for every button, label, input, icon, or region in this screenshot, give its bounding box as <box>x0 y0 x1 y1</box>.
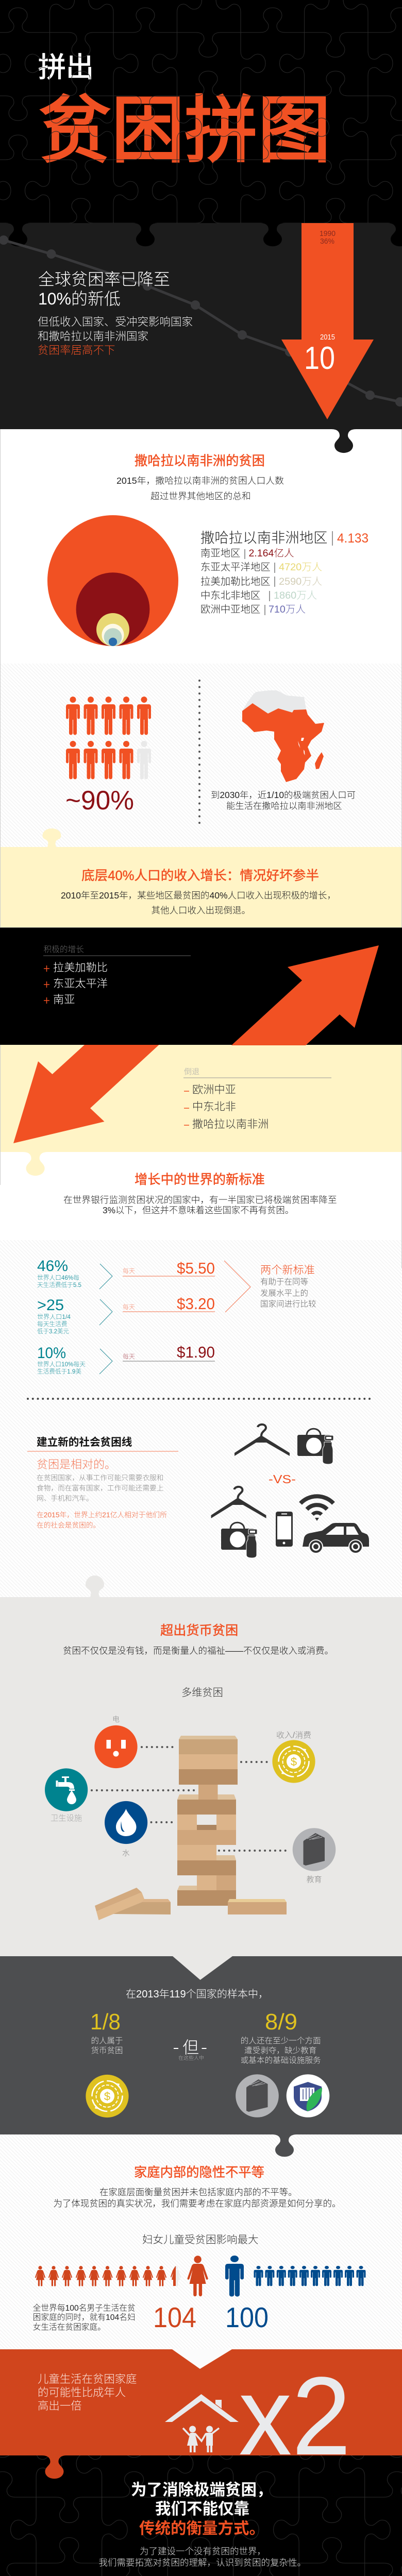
text block: 为了体现贫困的真实状况，我们需要考虑在家庭内部资源是如何分享的。 <box>54 2198 341 2209</box>
text block: 在家庭层面衡量贫困并未包括家庭内部的不平等。 <box>99 2187 297 2197</box>
text block <box>99 2546 306 2576</box>
panel: children <box>0 2349 402 2478</box>
text block: 的可能性比成年人 <box>38 2386 126 2399</box>
panel: new standards <box>0 1152 402 1240</box>
list: positive growth: 东亚太平洋 <box>53 977 108 990</box>
text block: relative poverty: 网、手机和汽车。 <box>37 1495 93 1502</box>
stat: 8/9: 的人还在至少一个方面 <box>241 2036 321 2045</box>
icon: infrastructure shield <box>287 2074 329 2117</box>
text block <box>63 1195 337 1215</box>
text block: low income countries: 和撒哈拉以南非洲国家 <box>38 330 148 343</box>
text block: 104 women: 女生活在贫困家庭。 <box>33 2323 106 2332</box>
puzzle knob <box>42 828 61 847</box>
icons: poor country needs <box>234 1425 333 1464</box>
panel: conclusion <box>0 2455 402 2576</box>
heading: 10%: 全球贫困率已降至 <box>38 270 170 289</box>
puzzle knob <box>23 1152 48 1176</box>
people chart: women <box>35 2256 208 2296</box>
stats: 104 and 100: 100 <box>225 2301 269 2333</box>
map: Africa <box>242 690 324 782</box>
panel: title header <box>0 0 402 224</box>
chevron: large <box>224 1261 250 1312</box>
legend: 1860万人 <box>274 590 317 601</box>
text block: 2015年，撒哈拉以南非洲的贫困人口人数 <box>116 476 284 486</box>
legend: 撒哈拉以南非洲地区 <box>200 530 328 546</box>
poverty line values <box>123 1259 215 1361</box>
stat: ~90%: ~90% <box>65 786 134 816</box>
stats: population share: 世界人口10%每天 <box>37 1361 86 1368</box>
text block <box>38 2373 137 2412</box>
text block: low income countries: 贫困率居高不下 <box>38 344 115 357</box>
stats: population share: 生活费低于1.9美 <box>37 1368 81 1375</box>
list: positive growth: 拉美加勒比 <box>53 961 108 974</box>
icons: rich country needs <box>211 1487 369 1558</box>
stats: population share: >25 <box>37 1297 64 1314</box>
icon: electricity: 电 <box>112 1715 120 1723</box>
arrow: 1990 to 2015: 36% <box>320 237 334 246</box>
text block: relative poverty: 在贫困国家，从事工作可能只需要衣服和 <box>37 1474 163 1482</box>
icon: sanitation: 卫生设施 <box>51 1814 82 1823</box>
puzzle knob <box>42 2455 67 2479</box>
title: main heading: 贫困拼图 <box>38 90 331 172</box>
heading: 撒哈拉以南非洲的贫困 <box>135 454 265 468</box>
puzzle knob <box>272 2134 297 2157</box>
panel: bottom 40 percent <box>0 828 402 927</box>
text block: 104 women <box>33 2303 136 2332</box>
stats: population share <box>37 1258 86 1375</box>
subheading: 妇女儿童受贫困影响最大 <box>142 2234 259 2246</box>
heading: 在2013年119个国家的样本中， <box>126 1988 269 2000</box>
arrow: 1990 to 2015 <box>281 223 374 419</box>
list: decline: 倒退 <box>184 1067 199 1076</box>
text block: 2030 projection: 能生活在撒哈拉以南非洲地区 <box>226 801 342 811</box>
icon: phone <box>276 1512 293 1547</box>
arrow: up <box>231 945 379 1045</box>
heading: 我们不能仅靠 <box>155 2500 249 2518</box>
poverty line values: $5.50 <box>177 1259 215 1277</box>
text block: 2030 projection: 到2030年，近1/10的极端贫困人口可 <box>211 790 356 800</box>
arrow: 1990 to 2015: 10 <box>304 341 335 376</box>
legend: 4720万人 <box>279 562 322 573</box>
puzzle knob <box>86 1575 104 1597</box>
legend: 南亚地区 <box>200 548 241 559</box>
stat: 1/8 <box>86 2009 129 2117</box>
icon: electricity <box>94 1715 138 1768</box>
panel: 119 countries sample <box>0 1956 402 2134</box>
icon: income and consumption: 收入/消费 <box>276 1731 311 1740</box>
stats: population share: 10% <box>37 1345 66 1362</box>
icon: education: 教育 <box>306 1875 322 1884</box>
stat: 8/9: 遭受剥夺，缺少教育 <box>244 2046 316 2055</box>
callout: but: 但 <box>182 2038 199 2057</box>
list: decline: 撒哈拉以南非洲 <box>192 1118 269 1130</box>
label: vs: -VS- <box>269 1472 296 1486</box>
panel: winners and losers <box>0 927 402 1152</box>
heading: 为了消除极端贫困， <box>131 2481 272 2499</box>
legend: 欧洲中亚地区 <box>200 604 260 615</box>
heading: 超出货币贫困 <box>160 1623 238 1638</box>
callout: two new standards: 国家间进行比较 <box>260 1299 316 1309</box>
stat: 1/8: 货币贫困 <box>91 2046 123 2055</box>
text block: 104 women: 全世界每100名男子生活在贫 <box>33 2303 136 2313</box>
text block: relative poverty: 贫困是相对的。 <box>37 1458 116 1471</box>
text block: 儿童生活在贫困家庭 <box>38 2373 137 2385</box>
icon: income and consumption <box>272 1731 315 1783</box>
text block <box>54 2187 341 2209</box>
stats: population share: 世界人口46%每 <box>37 1275 79 1281</box>
stats: 104 and 100 <box>153 2301 269 2333</box>
legend: 中东北非地区 <box>200 590 260 601</box>
text block: 3%以下，但这并不意味着这些国家不再有贫困。 <box>103 1205 294 1215</box>
list: positive growth: 南亚 <box>53 993 75 1006</box>
stats: population share: 天生活费低于5.5 <box>37 1282 81 1289</box>
nested circles chart <box>47 515 178 646</box>
heading: societal poverty line: 建立新的社会贫困线 <box>37 1436 132 1448</box>
panel: global poverty rate <box>0 223 402 429</box>
callout: two new standards: 两个新标准 <box>260 1264 315 1276</box>
callout: but: 在这些人中 <box>178 2055 204 2061</box>
heading: 10%: 10%的新低 <box>38 290 121 308</box>
subheading: 多维贫困 <box>181 1687 223 1699</box>
icon: sanitation <box>45 1768 88 1823</box>
icon: car <box>303 1523 369 1554</box>
arrow: down <box>13 1045 159 1143</box>
callout: two new standards: 有助于在同等 <box>260 1277 308 1286</box>
heading: 底层40%人口的收入增长：情况好坏参半 <box>81 868 319 883</box>
stat: 1/8: 1/8 <box>90 2009 121 2035</box>
list: decline: 欧洲中亚 <box>192 1083 236 1096</box>
list: decline: 中东北非 <box>192 1100 236 1113</box>
text block: 贫困不仅仅是没有钱，而是衡量人的福祉——不仅仅是收入或消费。 <box>63 1646 333 1656</box>
text block: 我们需要拓宽对贫困的理解，认识到贫困的复杂性。 <box>99 2557 306 2568</box>
panel: intra-household inequality <box>0 2134 402 2349</box>
text block <box>116 476 284 501</box>
stats: population share: 每天生活费 <box>37 1321 67 1328</box>
stat: x2: x2 <box>239 2353 351 2478</box>
stat: 8/9 <box>236 2009 329 2117</box>
poverty line values: 每天 <box>123 1267 135 1275</box>
text block: 高出一倍 <box>38 2400 82 2412</box>
poverty line values: $3.20 <box>177 1295 215 1313</box>
stats: population share: 46% <box>37 1258 68 1275</box>
poverty line values: 每天 <box>123 1303 135 1311</box>
panel: sub-Saharan Africa poverty <box>0 429 402 664</box>
chart: jenga tower <box>95 1736 287 1920</box>
icon: wifi <box>300 1496 333 1521</box>
callout: two new standards: 发展水平上的 <box>260 1289 308 1298</box>
text block <box>61 890 336 916</box>
heading: 家庭内部的隐性不平等 <box>134 2165 264 2180</box>
legend <box>200 530 368 615</box>
text block: 104 women: 困家庭的同时，就有104名妇 <box>33 2313 136 2322</box>
notch <box>173 1956 232 1980</box>
legend: 拉美加勒比地区 <box>200 576 271 587</box>
text block: relative poverty: 食物，而在富有国家，工作可能还需要上 <box>37 1484 163 1492</box>
legend: 东亚太平洋地区 <box>200 562 271 573</box>
icon: book <box>236 2074 279 2117</box>
arrow: 1990 to 2015: 2015 <box>320 333 335 342</box>
notch <box>172 2349 232 2369</box>
heading <box>131 2481 272 2537</box>
people icons: 90 percent <box>66 697 151 779</box>
text block: 其他人口收入出现倒退。 <box>152 905 250 916</box>
stats: population share: 低于3.2美元 <box>37 1328 69 1335</box>
text block: low income countries <box>38 316 193 357</box>
dotted connectors <box>92 1747 287 1851</box>
text block: 2010年至2015年，某些地区最贫困的40%人口收入出现积极的增长， <box>61 890 336 901</box>
icon: education <box>293 1828 336 1884</box>
puzzle knob <box>331 429 356 453</box>
legend: 4.133 <box>337 531 368 546</box>
title: small line: 拼出 <box>38 52 94 83</box>
people chart: men <box>225 2256 366 2297</box>
legend: 2.164亿人 <box>248 548 294 559</box>
text block: relative poverty <box>37 1458 167 1529</box>
text block: 在世界银行监测贫困状况的国家中，有一半国家已将极端贫困率降至 <box>63 1195 337 1205</box>
text block: 超过世界其他地区的总和 <box>150 491 251 501</box>
callout: but <box>174 2038 206 2061</box>
icon: house and children <box>165 2394 239 2452</box>
stat: 8/9: 8/9 <box>265 2009 297 2035</box>
puzzle knobs from header <box>6 223 402 246</box>
heading: 传统的衡量方式。 <box>139 2520 265 2537</box>
callout: two new standards <box>260 1264 316 1309</box>
list: positive growth <box>43 945 191 1006</box>
legend: 710万人 <box>269 604 306 615</box>
poverty line values: 每天 <box>123 1353 135 1360</box>
stats: population share: 世界人口1/4 <box>37 1314 71 1320</box>
text block: 2030 projection <box>211 790 356 811</box>
arrow: 1990 to 2015: 1990 <box>320 229 336 238</box>
text block: 为了建设一个没有贫困的世界， <box>140 2546 266 2556</box>
heading: 10% <box>38 270 170 308</box>
panel: Africa share <box>0 664 402 847</box>
list: positive growth: 积极的增长 <box>43 945 84 954</box>
text block: relative poverty: 在的社会是贫困的。 <box>37 1521 100 1529</box>
list: decline <box>183 1067 331 1130</box>
heading: 增长中的世界的新标准 <box>135 1173 265 1187</box>
stats: 104 and 100: 104 <box>153 2301 196 2333</box>
stat: 8/9: 或基本的基础设施服务 <box>241 2056 321 2065</box>
line chart: poverty trend <box>0 235 402 406</box>
chevrons <box>99 1264 112 1374</box>
poverty line values: $1.90 <box>177 1343 215 1361</box>
text block: low income countries: 但低收入国家、受冲突影响国家 <box>38 316 193 328</box>
panel: beyond monetary poverty <box>0 1575 402 1956</box>
stat: 1/8: 的人属于 <box>91 2036 123 2045</box>
icon: water <box>105 1801 147 1858</box>
panel: poverty lines <box>0 1240 402 1597</box>
legend: 2590万人 <box>279 576 322 587</box>
text block: relative poverty: 在2015年，世界上约21亿人相对于他们所 <box>37 1511 167 1519</box>
icon: water: 水 <box>122 1849 130 1858</box>
